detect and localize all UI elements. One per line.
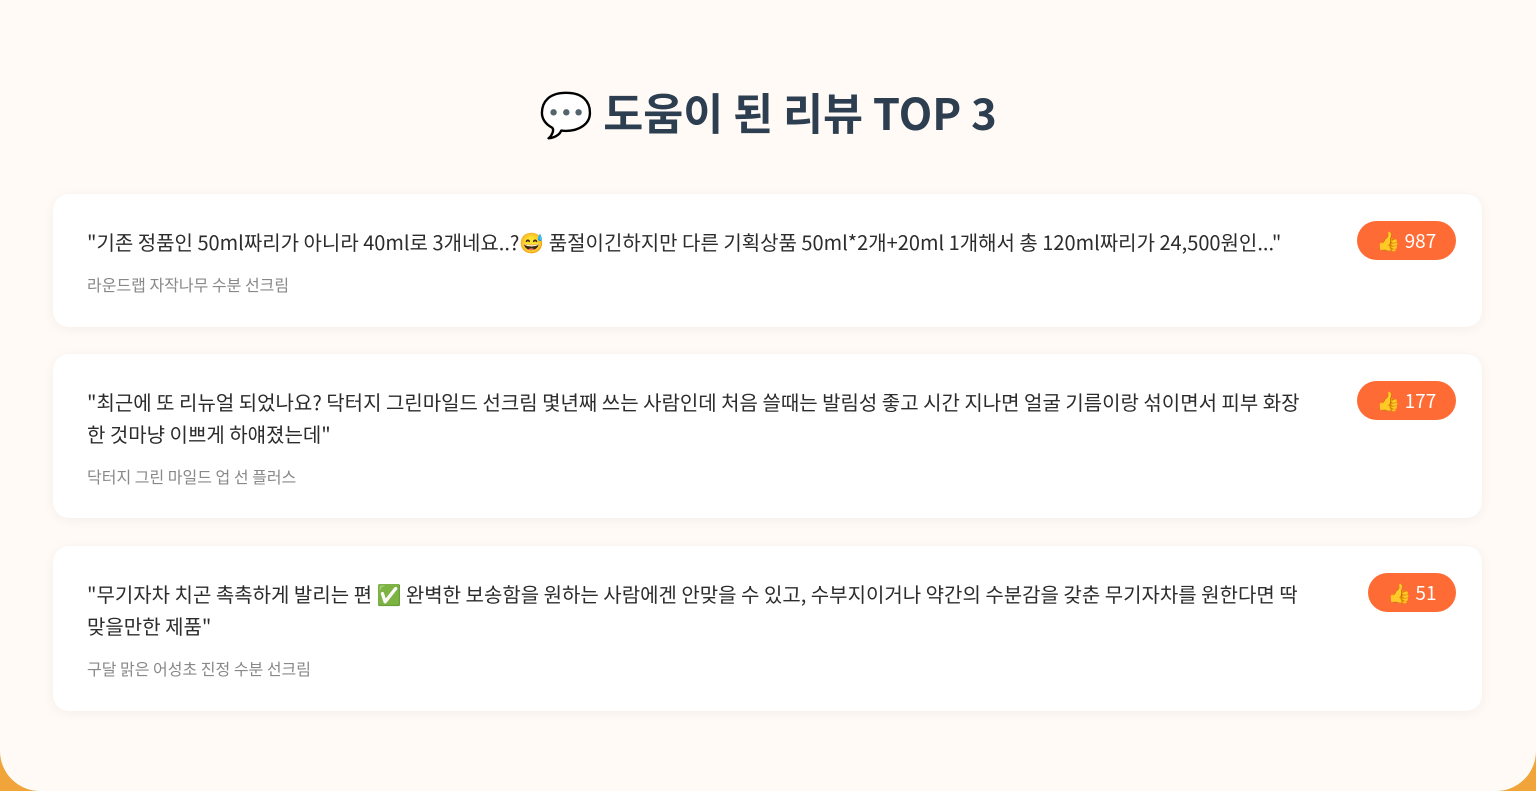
- like badge 2: [1357, 381, 1456, 420]
- like badge 1: [1357, 221, 1456, 260]
- card 1: [53, 194, 1482, 327]
- review text 3: "무기자차 치곤 촉촉하게 발리는 편 ✅ 완벽한 보송함을 원하는 사람에겐 안맞을 수 있고, 수부지이거나 약간의 수분감을 갖춘 무기자차를 원한다면 딱 맞을만한 제품": [87, 579, 1298, 640]
- review text 1: "기존 정품인 50ml짜리가 아니라 40ml로 3개네요..?😅 품절이긴하지만 다른 기획상품 50ml*2개+20ml 1개해서 총 120ml짜리가 24,500원인...": [87, 227, 1281, 256]
- like badge 2: 👍 177: [1377, 387, 1436, 414]
- like badge 3: [1368, 573, 1456, 612]
- product name 2: 닥터지 그린 마일드 업 선 플러스: [87, 464, 296, 488]
- card 3: [53, 546, 1482, 711]
- like badge 3: 👍 51: [1387, 579, 1436, 606]
- review text 2: "최근에 또 리뉴얼 되었나요? 닥터지 그린마일드 선크림 몇년째 쓰는 사람인데 처음 쓸때는 발림성 좋고 시간 지나면 얼굴 기름이랑 섞이면서 피부 화장한 것마냥 이쁘게 하얘졌는데": [87, 387, 1300, 448]
- title: 💬 도움이 된 리뷰 TOP 3: [539, 80, 997, 143]
- card 2: [53, 354, 1482, 518]
- product name 3: 구달 맑은 어성초 진정 수분 선크림: [87, 656, 311, 680]
- product name 1: 라운드랩 자작나무 수분 선크림: [87, 272, 289, 296]
- like badge 1: 👍 987: [1377, 227, 1436, 254]
